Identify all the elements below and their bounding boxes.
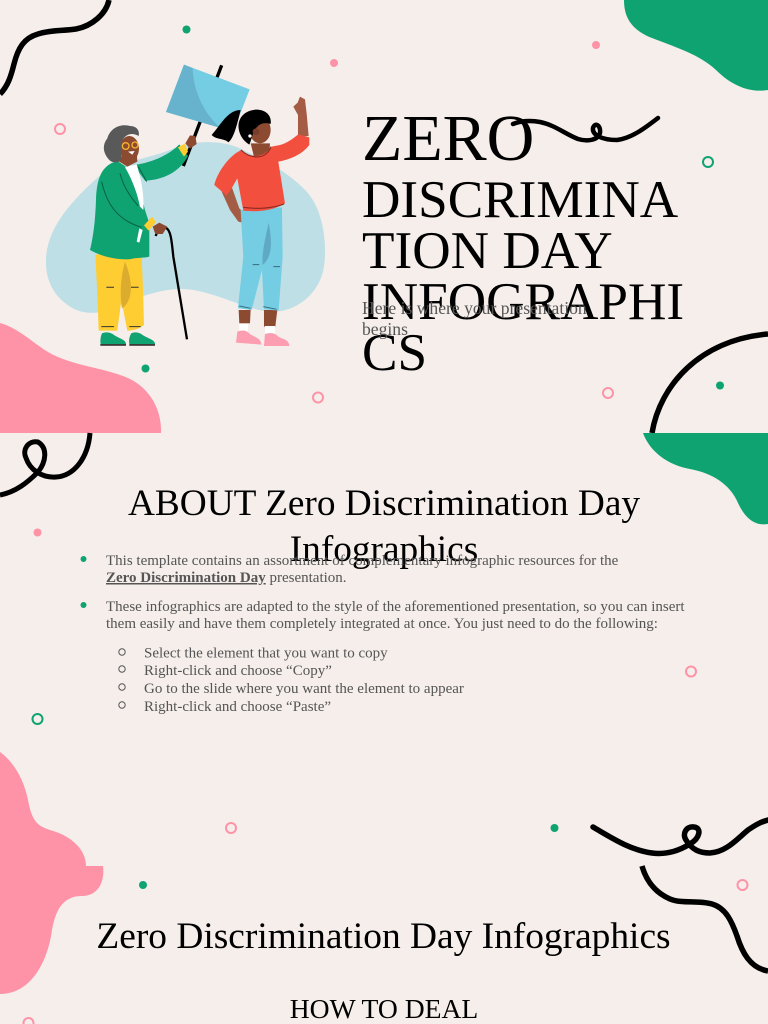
blob: top right green: [624, 0, 768, 91]
heading: about: Infographics: [290, 529, 478, 570]
title: Zero Discrimination Day Infographics: ZERO: [362, 102, 534, 175]
figure: older woman in green cardigan with cane: [90, 125, 197, 345]
sub-list: steps: Right-click and choose “Copy”: [144, 663, 332, 679]
title: Zero Discrimination Day Infographics: INFOGRAPHI: [362, 272, 684, 331]
arc: black curve right of title slide: [652, 334, 768, 433]
blob: pale blue backdrop: [46, 142, 325, 313]
icon: protest sign with pole: [166, 65, 250, 166]
paragraph: first: presentation.: [269, 570, 347, 586]
sub-list: steps: Select the element that you want to copy: [144, 646, 388, 662]
heading: about: ABOUT Zero Discrimination Day: [128, 483, 640, 524]
heading: about: [128, 483, 640, 570]
illustration: two women protesting: [46, 65, 325, 346]
squiggle: top left black line: [0, 0, 109, 94]
title: Zero Discrimination Day Infographics: DISCRIMINA: [362, 170, 679, 229]
blob: pink left of lower slide: [0, 752, 103, 994]
squiggle: lower right wave with loop: [593, 820, 768, 853]
subtitle: Here is where your presentation: [362, 298, 587, 318]
paragraph: first: Zero Discrimination Day: [106, 570, 266, 586]
figure: younger woman in red top waving: [212, 97, 309, 346]
title: Zero Discrimination Day Infographics: [362, 102, 684, 382]
blob: green upper right of about slide: [643, 433, 768, 524]
sub-list: steps: [119, 646, 464, 715]
heading: lower slide title: Zero Discrimination Day Infographics: [96, 916, 671, 957]
squiggle: black loop upper left of about slide: [0, 433, 90, 495]
bullet: first: [80, 556, 86, 562]
squiggle: over the title: [513, 118, 658, 140]
paragraph: second: These infographics are adapted to the style of the aforementioned presentation, so you can insert: [106, 599, 685, 615]
paragraph: second: them easily and have them completely integrated at once. You just need to do the following:: [106, 616, 658, 632]
subtitle: begins: [362, 319, 408, 339]
text block: about list: [80, 553, 688, 715]
bullet: second: [80, 602, 86, 608]
blob: pink lower left of title slide: [0, 323, 161, 433]
heading: how to deal: HOW TO DEAL: [290, 993, 478, 1024]
sub-list: steps: Right-click and choose “Paste”: [144, 699, 331, 715]
title: Zero Discrimination Day Infographics: CS: [362, 323, 427, 382]
paragraph: first: This template contains an assortment of complementary infographic resources for the: [106, 553, 618, 569]
sub-list: steps: Go to the slide where you want the element to appear: [144, 681, 464, 697]
subtitle: [362, 298, 587, 339]
title: Zero Discrimination Day Infographics: TION DAY: [362, 221, 613, 280]
squiggle: lower right curve: [642, 866, 768, 971]
